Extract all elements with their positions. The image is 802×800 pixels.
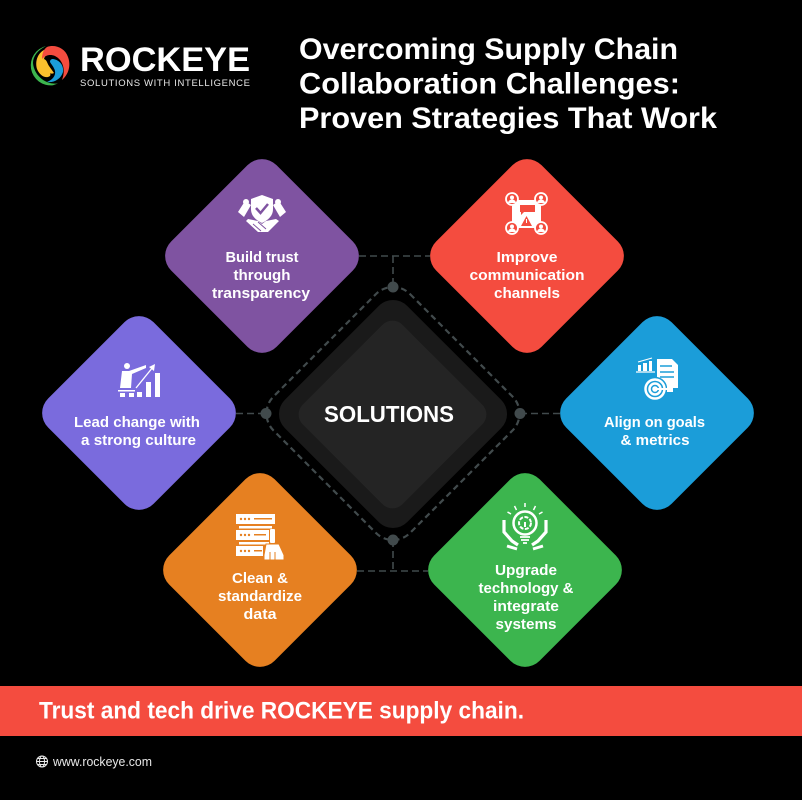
outer diamond <box>271 292 515 536</box>
label: through <box>234 268 290 284</box>
label: Improve <box>496 250 558 266</box>
panel: lead change <box>34 308 244 518</box>
label: systems <box>496 617 556 633</box>
panel: align on goals <box>552 308 762 518</box>
takeaway banner <box>0 686 802 736</box>
connector lines <box>236 256 560 571</box>
panel: upgrade technology <box>420 465 630 675</box>
label <box>212 250 310 302</box>
logo wordmark: ROCKEYE <box>80 41 250 79</box>
website url: www.rockeye.com <box>52 754 152 769</box>
label: Build trust <box>226 250 299 266</box>
label: integrate <box>493 599 559 615</box>
center label: SOLUTIONS <box>324 401 454 427</box>
takeaway banner: Trust and tech drive ROCKEYE supply chain. <box>39 698 524 724</box>
label <box>74 415 200 449</box>
label: Align on goals <box>604 415 705 431</box>
label <box>604 415 705 449</box>
icon: server with broom <box>236 514 284 560</box>
icon: shield handshake <box>238 195 286 232</box>
icon: chart, document and target <box>636 358 678 400</box>
icon: globe <box>36 756 48 767</box>
label: channels <box>494 286 560 302</box>
logo <box>31 41 250 89</box>
icon: light bulb in hands <box>504 503 546 549</box>
label: a strong culture <box>81 433 196 449</box>
label: standardize <box>218 589 302 605</box>
label: Upgrade <box>495 563 557 579</box>
label: Lead change with <box>74 415 200 431</box>
label <box>470 250 584 302</box>
panel: clean data <box>155 465 365 675</box>
label: transparency <box>212 286 310 302</box>
icon: leader with rising chart <box>118 363 160 397</box>
icon: people network <box>506 193 547 234</box>
label: communication <box>470 268 584 284</box>
dashed ring <box>257 277 529 550</box>
label <box>218 571 302 623</box>
label: technology & <box>478 581 574 597</box>
title: Collaboration Challenges: <box>299 68 680 100</box>
label: data <box>244 607 278 623</box>
title: Overcoming Supply Chain <box>299 33 678 66</box>
connector nodes <box>260 282 526 546</box>
panel: improve communication <box>422 151 632 361</box>
title <box>299 33 717 135</box>
label <box>478 563 574 633</box>
panel: build trust <box>157 151 367 361</box>
title: Proven Strategies That Work <box>299 102 717 135</box>
footer website <box>36 754 152 769</box>
logo tagline: SOLUTIONS WITH INTELLIGENCE <box>80 78 250 89</box>
central solutions diamond <box>257 277 529 550</box>
label: Clean & <box>232 571 289 587</box>
label: & metrics <box>620 433 690 449</box>
inner diamond <box>293 315 492 514</box>
icon: logo swirl <box>31 46 69 85</box>
